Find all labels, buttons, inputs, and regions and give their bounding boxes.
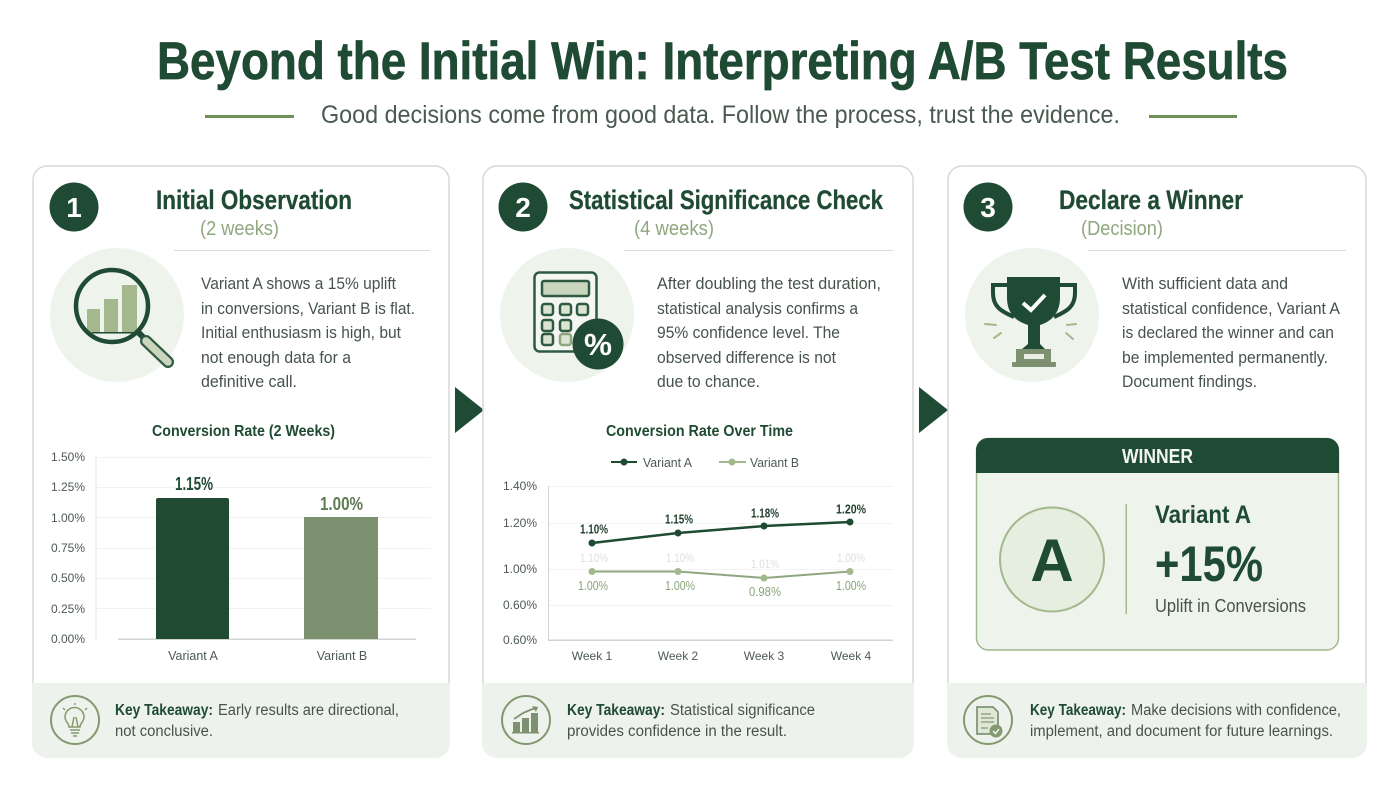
panel 2 description: 95% confidence level. The — [657, 323, 840, 342]
series: variant B: 1.01% — [751, 557, 779, 571]
panel 2 heading: (4 weeks) — [634, 218, 714, 240]
bar: variant A: 1.15% — [175, 474, 213, 494]
series: variant B: 0.98% — [749, 585, 781, 599]
variant A badge: A — [1030, 527, 1074, 594]
bar chart: conversion rate 2 weeks: 0.25% — [51, 602, 85, 616]
bar chart: conversion rate 2 weeks: 0.50% — [51, 571, 85, 585]
line chart: conversion rate over time: Week 2 — [658, 649, 699, 663]
series: variant A — [580, 502, 866, 546]
line chart: conversion rate over time: Week 3 — [744, 649, 785, 663]
legend — [611, 456, 799, 470]
bar chart: conversion rate 2 weeks: Variant A — [168, 649, 219, 663]
line chart: conversion rate over time: 1.00% — [503, 562, 537, 576]
series: variant B: 1.00% — [837, 551, 865, 565]
panel 1 description: definitive call. — [201, 372, 297, 391]
panel: statistical significance check — [482, 166, 914, 758]
line chart: conversion rate over time: 0.60% — [503, 598, 537, 612]
panel 2 description: statistical analysis confirms a — [657, 299, 858, 318]
series: variant A: 1.15% — [665, 512, 693, 526]
bar chart: conversion rate 2 weeks — [51, 423, 431, 663]
panel 3 description: statistical confidence, Variant A — [1122, 299, 1341, 318]
series: variant B: 1.00% — [665, 579, 695, 593]
series: variant B: 1.10% — [666, 551, 694, 565]
panel 1 description: Variant A shows a 15% uplift — [201, 274, 396, 293]
line chart: conversion rate over time: Conversion Rate Over Time — [606, 423, 793, 440]
bar chart: conversion rate 2 weeks: 0.00% — [51, 632, 85, 646]
icon: magnifying glass over bars — [50, 248, 184, 382]
legend: Variant B — [750, 456, 799, 470]
panel 3 description — [1122, 274, 1341, 391]
icon: calculator with percent — [500, 248, 634, 382]
series: variant B: 1.00% — [836, 579, 866, 593]
step number 1: 1 — [66, 192, 82, 223]
panel 2 description: due to chance. — [657, 372, 760, 391]
panel 3 key takeaway: Key Takeaway: — [1030, 702, 1126, 719]
panel 1 heading: Initial Observation — [156, 185, 352, 215]
arrow: step 1 to step 2 — [455, 387, 484, 433]
bar chart: conversion rate 2 weeks: 1.25% — [51, 480, 85, 494]
icon: trophy with check — [965, 248, 1099, 382]
bar chart: conversion rate 2 weeks: 1.00% — [51, 511, 85, 525]
panel 2 heading — [569, 185, 893, 251]
step number 2 — [498, 182, 548, 232]
step number 2: 2 — [515, 192, 531, 223]
panel 1 description: not enough data for a — [201, 348, 351, 367]
series: variant B: 1.00% — [578, 579, 608, 593]
series: variant B: 1.10% — [580, 551, 608, 565]
panel 2 description: After doubling the test duration, — [657, 274, 881, 293]
panel 1 description: in conversions, Variant B is flat. — [201, 299, 415, 318]
panel: declare a winner — [947, 166, 1367, 758]
winner result: Variant A — [1155, 501, 1251, 529]
icon: rising bar chart — [502, 696, 550, 744]
panel 2 key takeaway: Statistical significance — [670, 702, 815, 719]
bar: variant B: 1.00% — [320, 494, 363, 514]
panel 1 heading: (2 weeks) — [200, 218, 279, 240]
panel 3 key takeaway: implement, and document for future learnings. — [1030, 723, 1333, 740]
step number 3: 3 — [980, 192, 996, 223]
panel 1 key takeaway: Key Takeaway: — [115, 702, 213, 719]
panel 2 key takeaway: provides confidence in the result. — [567, 723, 787, 740]
panel 3 description: be implemented permanently. — [1122, 348, 1328, 367]
panel 1 key takeaway: Early results are directional, — [218, 702, 399, 719]
line chart: conversion rate over time: 1.40% — [503, 479, 537, 493]
line chart: conversion rate over time: Week 1 — [572, 649, 613, 663]
panel 3 key takeaway — [947, 683, 1367, 758]
winner result — [1155, 501, 1306, 616]
panel 2 heading: Statistical Significance Check — [569, 185, 884, 215]
line chart: conversion rate over time — [503, 423, 893, 663]
series: variant A: 1.10% — [580, 522, 608, 536]
step number 3 — [964, 182, 1012, 232]
bar: variant A — [156, 474, 229, 639]
line chart: conversion rate over time: Week 4 — [831, 649, 872, 663]
panel 3 heading: Declare a Winner — [1059, 185, 1243, 215]
panel 2 key takeaway: Key Takeaway: — [567, 702, 665, 719]
series: variant A: 1.18% — [751, 506, 779, 520]
panel 1 key takeaway: not conclusive. — [115, 723, 213, 740]
panel 3 description: Document findings. — [1122, 372, 1257, 391]
winner card: WINNER — [1122, 446, 1193, 468]
winner card — [976, 438, 1339, 650]
bar: variant B — [304, 494, 378, 639]
panel 3 description: With sufficient data and — [1122, 274, 1288, 293]
panel 2 key takeaway — [482, 683, 914, 758]
panel 1 key takeaway — [32, 683, 450, 758]
panel 2 description: observed difference is not — [657, 348, 836, 367]
panel 3 description: is declared the winner and can — [1122, 323, 1334, 342]
line chart: conversion rate over time: 0.60% — [503, 633, 537, 647]
icon: document with check — [964, 696, 1012, 744]
panel 1 heading — [156, 185, 430, 251]
panel 1 description — [201, 274, 415, 391]
icon: calculator with percent: % — [584, 327, 612, 362]
legend: Variant A — [643, 456, 693, 470]
icon: light bulb — [51, 696, 99, 744]
bar chart: conversion rate 2 weeks: 1.50% — [51, 450, 85, 464]
panel 3 heading — [1059, 185, 1346, 251]
arrow: step 2 to step 3 — [919, 387, 948, 433]
winner result: +15% — [1155, 536, 1263, 592]
panel 2 description — [657, 274, 881, 391]
series: variant B — [578, 551, 866, 599]
bar chart: conversion rate 2 weeks: Conversion Rate (2 Weeks) — [152, 423, 335, 440]
subtitle: Good decisions come from good data. Follow the process, trust the evidence. — [321, 101, 1120, 129]
panel 1 description: Initial enthusiasm is high, but — [201, 323, 401, 342]
panel 3 heading: (Decision) — [1081, 218, 1163, 240]
bar chart: conversion rate 2 weeks: 0.75% — [51, 541, 85, 555]
step number 1 — [50, 182, 98, 232]
series: variant A: 1.20% — [836, 502, 866, 516]
line chart: conversion rate over time: 1.20% — [503, 516, 537, 530]
variant A badge — [1000, 508, 1104, 612]
panel 3 key takeaway: Make decisions with confidence, — [1131, 702, 1341, 719]
bar chart: conversion rate 2 weeks: Variant B — [317, 649, 367, 663]
panel: initial observation — [32, 166, 450, 758]
winner result: Uplift in Conversions — [1155, 596, 1306, 616]
